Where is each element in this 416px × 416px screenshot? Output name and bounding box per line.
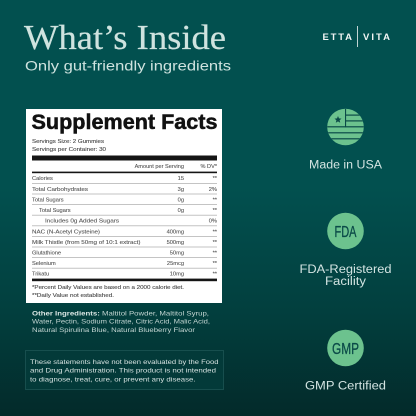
label: Made in USA: Made in USA — [309, 160, 382, 172]
table rows: NAC (N-Acetyl Cysteine) — [32, 229, 100, 235]
table rows: 500mg — [167, 240, 184, 246]
disclaimer box: to diagnose, treat, cure, or prevent any disease. — [30, 376, 196, 383]
icon: FDA — [327, 213, 364, 249]
table rows: Includes 0g Added Sugars — [45, 219, 119, 225]
subtitle: Only gut-friendly ingredients — [25, 58, 231, 74]
table rows: Calories — [32, 176, 53, 182]
label: FDA-Registered Facility: FDA-Registered — [300, 264, 392, 276]
label: GMP Certified: GMP Certified — [305, 380, 386, 392]
title: What’s Inside — [24, 18, 226, 57]
servings text: Servings Size: 2 Gummies — [32, 139, 104, 145]
other ingredients — [32, 312, 210, 334]
servings text — [32, 139, 106, 153]
icon: GMP: GMP — [332, 341, 359, 358]
table rows: Total Sugars — [39, 208, 71, 214]
icon: GMP — [327, 330, 364, 366]
label: FDA-Registered Facility — [300, 264, 392, 288]
table rows: 0g — [178, 208, 184, 214]
logo: Etta Vita: ETTA — [322, 32, 352, 43]
table rows: ** — [213, 272, 218, 278]
footnotes: **Daily Value not established. — [32, 293, 114, 299]
table rows: 3g — [178, 187, 184, 193]
logo: Etta Vita: VITA — [363, 32, 390, 43]
table rows: 15 — [178, 176, 184, 182]
thick bar — [32, 156, 217, 160]
bottom bar — [32, 279, 217, 281]
table rows: ** — [213, 240, 218, 246]
table rows: 2% — [209, 187, 217, 193]
table rows: Selenium — [32, 261, 56, 267]
disclaimer box: and Drug Administration. This product is not intended — [30, 368, 217, 375]
table header: % DV* — [201, 164, 218, 170]
table rows: ** — [213, 198, 218, 204]
table rows: ** — [213, 176, 218, 182]
logo: Etta Vita — [322, 26, 390, 47]
table rows: ** — [213, 261, 218, 267]
table rows — [32, 176, 218, 278]
table rows: Total Sugars — [32, 198, 64, 204]
icon: FDA: FDA — [334, 224, 357, 241]
servings text: Servings per Container: 30 — [32, 147, 106, 153]
table rows: Trikatu — [32, 272, 49, 278]
disclaimer box — [26, 350, 224, 390]
table rows: ** — [213, 229, 218, 235]
table rows: Total Carbohydrates — [32, 187, 88, 193]
panel: supplement facts — [26, 109, 222, 303]
table rows: Milk Thistle (from 50mg of 10:1 extract) — [32, 240, 141, 246]
footnotes: *Percent Daily Values are based on a 2000 calorie diet. — [32, 285, 184, 291]
table rows: 400mg — [167, 229, 184, 235]
table header: Amount per Serving — [135, 164, 184, 170]
other ingredients: Water, Pectin, Sodium Citrate, Citric Acid, Malic Acid, — [32, 320, 210, 326]
table rows: 0g — [178, 198, 184, 204]
table rows: 25mcg — [167, 261, 184, 267]
table rows: ** — [213, 208, 218, 214]
label: FDA-Registered Facility: Facility — [325, 276, 366, 288]
table rows: 10mg — [170, 272, 184, 278]
disclaimer box: These statements have not been evaluated by the Food — [30, 359, 219, 366]
other ingredients: Natural Spirulina Blue, Natural Blueberry Flavor — [32, 328, 195, 334]
heading: supplement facts: Supplement Facts — [32, 111, 218, 134]
table rows: 50mg — [170, 250, 184, 256]
other ingredients: Other Ingredients: Maltitol Powder, Maltitol Syrup, — [32, 312, 209, 318]
icon: USA flag — [327, 109, 365, 145]
table header — [135, 164, 218, 170]
table rows: Glutathione — [32, 250, 61, 256]
table rows: ** — [213, 250, 218, 256]
footnotes — [32, 285, 184, 299]
table rows: 0% — [209, 219, 217, 225]
